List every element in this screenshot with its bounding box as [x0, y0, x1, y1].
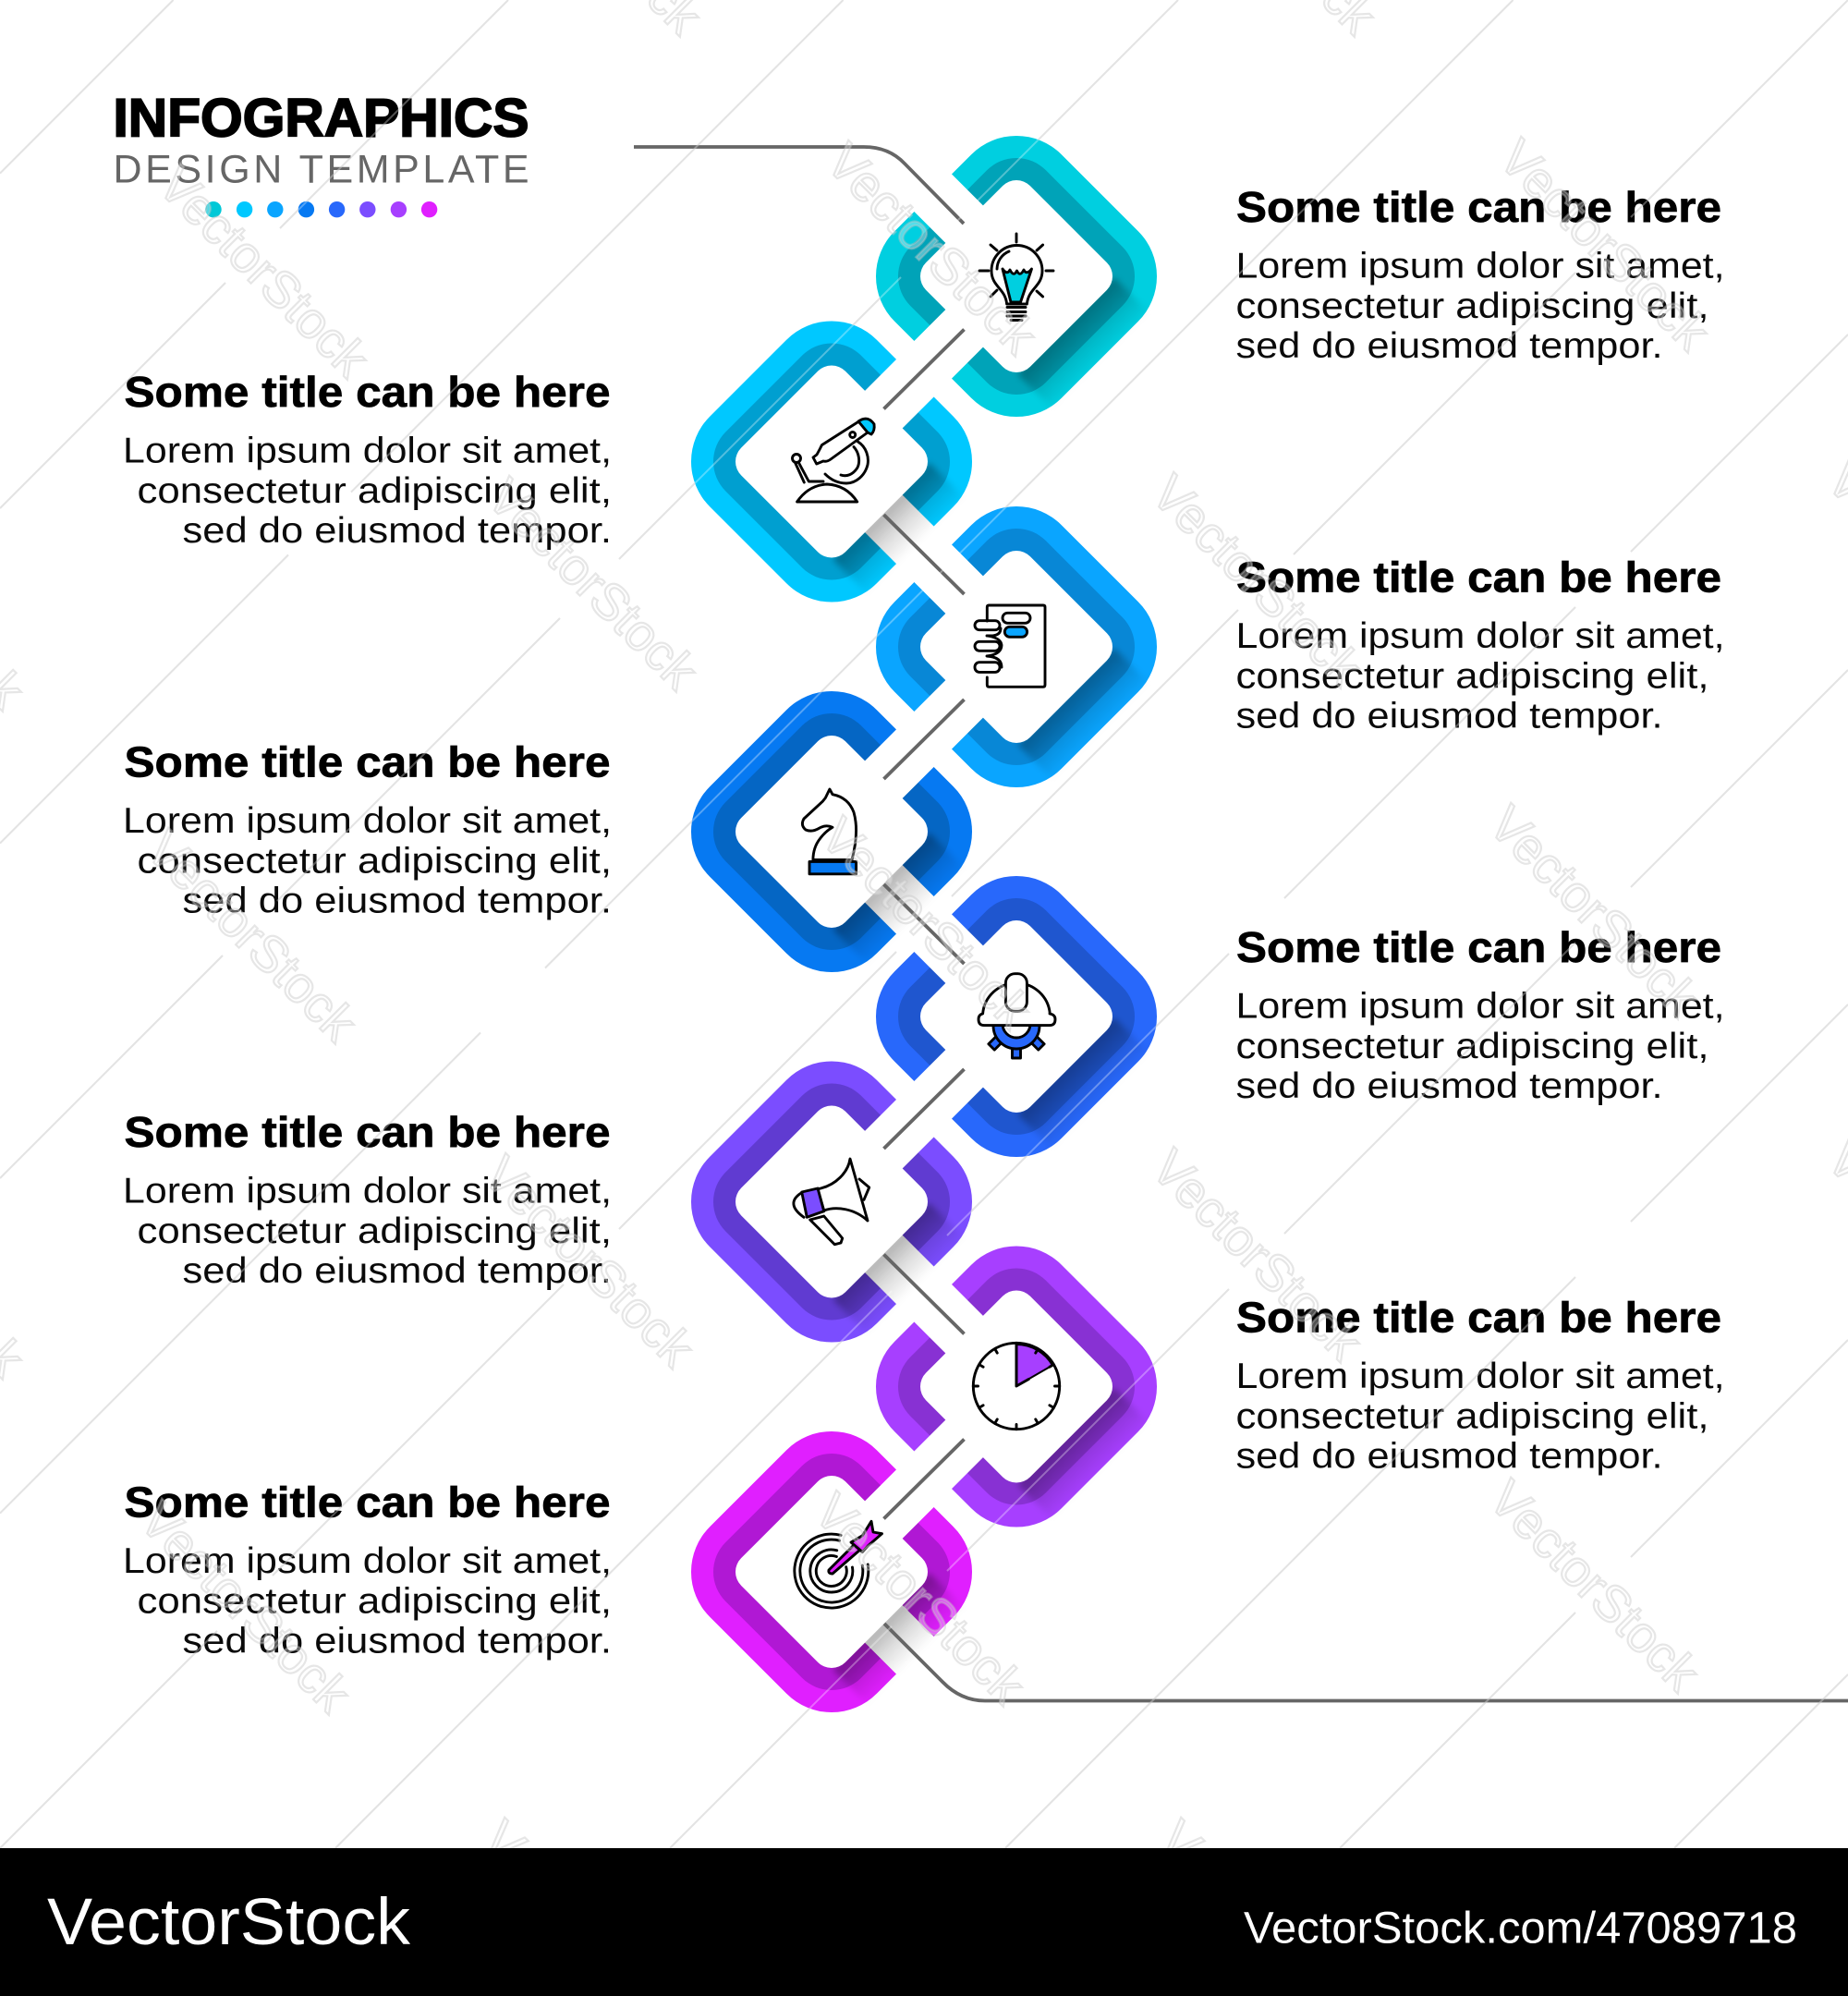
diamond 6 violet [664, 1030, 1008, 1373]
icon: microscope [793, 419, 874, 502]
icon: clock [973, 1343, 1060, 1430]
text block 7: consectetur adipiscing elit, [1236, 1396, 1709, 1436]
text block 4: sed do eiusmod tempor. [183, 882, 612, 921]
watermarks: VectorStock [1489, 128, 1720, 361]
text block 5: Lorem ipsum dolor sit amet, [1236, 987, 1724, 1026]
diamond 7 purple [840, 1215, 1185, 1560]
footer bar [0, 1848, 1848, 1996]
text block 8: Some title can be here [124, 1479, 610, 1527]
watermarks: VectorStock [810, 807, 1042, 1040]
watermarks: VectorStock [804, 1482, 1036, 1715]
watermarks: VectorStock [129, 1491, 361, 1723]
text block 1: sed do eiusmod tempor. [1236, 326, 1663, 366]
text block 3: Some title can be here [1236, 553, 1721, 601]
text block 7: Lorem ipsum dolor sit amet, [1236, 1357, 1724, 1396]
text block 2: sed do eiusmod tempor. [183, 511, 612, 551]
text block 7: Some title can be here [1236, 1294, 1721, 1342]
text block 5: consectetur adipiscing elit, [1236, 1027, 1709, 1066]
text block 1: consectetur adipiscing elit, [1236, 286, 1709, 326]
text block 4 [123, 737, 612, 921]
heading [113, 89, 529, 192]
connector lines [634, 147, 1848, 1700]
footer bar: VectorStock.com/47089718 [1244, 1905, 1797, 1953]
text block 8 [123, 1479, 612, 1661]
text block 8: consectetur adipiscing elit, [137, 1581, 612, 1621]
text block 2: consectetur adipiscing elit, [137, 471, 612, 511]
text block 1: Some title can be here [1236, 183, 1721, 231]
footer bar: VectorStock [47, 1886, 411, 1959]
watermarks: VectorStock [477, 468, 709, 700]
watermarks: VectorStock [1141, 1138, 1373, 1371]
icon: light bulb [979, 234, 1053, 320]
text block 6: consectetur adipiscing elit, [137, 1211, 612, 1251]
watermarks: VectorStock [1478, 795, 1710, 1028]
text block 4: Some title can be here [124, 737, 610, 785]
colour dots [205, 201, 437, 217]
heading: DESIGN TEMPLATE [113, 148, 529, 192]
icon: notebook [975, 605, 1045, 687]
text block 1 [1236, 183, 1724, 366]
diamond 4 blue [664, 660, 1008, 1004]
watermarks: VectorStock [148, 155, 380, 388]
text block 3: sed do eiusmod tempor. [1236, 697, 1663, 736]
text block 2: Some title can be here [124, 368, 610, 416]
heading: INFOGRAPHICS [113, 89, 529, 149]
text block 1: Lorem ipsum dolor sit amet, [1236, 246, 1724, 286]
text block 6: Lorem ipsum dolor sit amet, [123, 1172, 612, 1211]
watermarks: VectorStock [816, 132, 1048, 365]
text block 2 [123, 368, 612, 551]
text block 6: sed do eiusmod tempor. [183, 1251, 612, 1291]
text block 5: Some title can be here [1236, 923, 1721, 971]
text block 8: Lorem ipsum dolor sit amet, [123, 1541, 612, 1581]
diamond 1 teal [840, 104, 1185, 449]
watermarks: VectorStock [1141, 464, 1373, 697]
text block 3: Lorem ipsum dolor sit amet, [1236, 616, 1724, 656]
icon: megaphone [794, 1159, 869, 1245]
diamond 5 royal blue [840, 845, 1185, 1189]
text block 5: sed do eiusmod tempor. [1236, 1066, 1663, 1106]
text block 4: consectetur adipiscing elit, [137, 841, 612, 881]
watermarks: VectorStock [473, 1145, 705, 1378]
icon: chess knight [802, 789, 857, 874]
text block 3 [1236, 553, 1724, 736]
text block 6 [123, 1108, 612, 1291]
diamond 8 magenta [664, 1400, 1008, 1744]
text block 5 [1236, 923, 1724, 1106]
text block 2: Lorem ipsum dolor sit amet, [123, 431, 612, 471]
text block 6: Some title can be here [124, 1108, 610, 1156]
text block 7 [1236, 1294, 1724, 1477]
icon: target with arrow [795, 1521, 881, 1608]
text block 8: sed do eiusmod tempor. [183, 1622, 612, 1661]
watermarks: VectorStock [136, 820, 368, 1053]
text block 4: Lorem ipsum dolor sit amet, [123, 801, 612, 841]
diamond 2 cyan [664, 290, 1008, 633]
text block 3: consectetur adipiscing elit, [1236, 656, 1709, 696]
watermarks: VectorStock [1478, 1469, 1710, 1702]
text block 7: sed do eiusmod tempor. [1236, 1437, 1663, 1477]
diamond 3 sky blue [840, 475, 1185, 820]
icon: helmet and gear [979, 974, 1055, 1058]
